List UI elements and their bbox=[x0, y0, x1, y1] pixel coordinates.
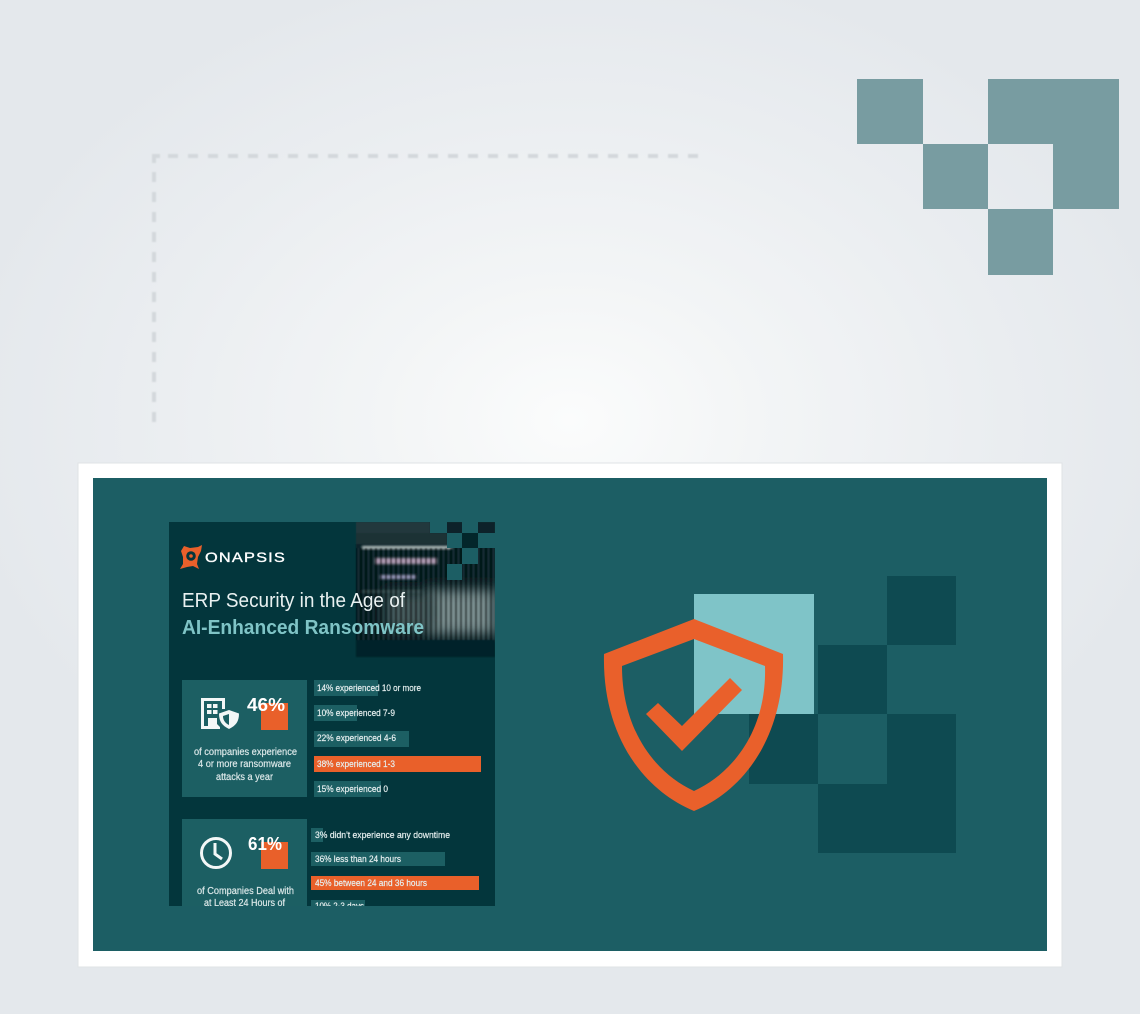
icon: building with shield bbox=[201, 698, 239, 729]
logo mark bbox=[180, 545, 202, 569]
stat description bbox=[197, 886, 294, 906]
bar chart: ransomware attacks per year: 22% experienced 4-6 bbox=[317, 733, 396, 744]
title: ERP Security in the Age of bbox=[182, 590, 405, 612]
orange accent square bbox=[261, 842, 288, 869]
stat: 61%: 61% bbox=[248, 834, 282, 854]
hero pixel squares bbox=[430, 522, 495, 580]
stat description: of companies experience bbox=[194, 747, 298, 758]
bar chart: ransomware attacks per year: 15% experienced 0 bbox=[317, 784, 388, 795]
stat card: 46% bbox=[182, 680, 307, 797]
bar chart: ransomware attacks per year: 10% experienced 7-9 bbox=[317, 708, 395, 719]
icon: clock bbox=[202, 838, 230, 868]
hero image bbox=[356, 522, 495, 657]
decorative squares top right bbox=[857, 79, 1119, 275]
bar chart: ransomware attacks per year bbox=[314, 680, 481, 797]
infographic preview panel bbox=[169, 522, 495, 919]
stat description: 4 or more ransomware bbox=[198, 759, 292, 770]
stat description: attacks a year bbox=[216, 772, 274, 783]
stat description: of Companies Deal with bbox=[197, 886, 294, 897]
stat description bbox=[194, 747, 298, 783]
title bbox=[182, 592, 424, 634]
icon: shield with check bbox=[604, 619, 783, 811]
logo wordmark: ONAPSIS bbox=[205, 549, 286, 565]
bar chart: downtime: 10% 2-3 days bbox=[315, 901, 364, 912]
bar chart: ransomware attacks per year: 38% experienced 1-3 bbox=[317, 759, 395, 770]
stat: 46%: 46% bbox=[247, 695, 285, 715]
checkerboard squares bbox=[749, 576, 956, 853]
title: AI-Enhanced Ransomware bbox=[182, 617, 424, 639]
dashed corner frame bbox=[154, 156, 698, 422]
stat description: at Least 24 Hours of bbox=[204, 898, 285, 909]
teal banner bbox=[93, 478, 1047, 951]
stat card: 61% bbox=[182, 819, 307, 906]
white card bbox=[78, 463, 1062, 967]
bar chart: downtime bbox=[311, 828, 479, 914]
orange accent square bbox=[261, 703, 288, 730]
bar chart: ransomware attacks per year: 14% experienced 10 or more bbox=[317, 683, 421, 694]
bar chart: downtime: 3% didn't experience any downtime bbox=[315, 830, 450, 841]
bar chart: downtime: 45% between 24 and 36 hours bbox=[315, 878, 427, 889]
bar chart: downtime: 36% less than 24 hours bbox=[315, 854, 401, 865]
light teal square bbox=[694, 594, 814, 714]
